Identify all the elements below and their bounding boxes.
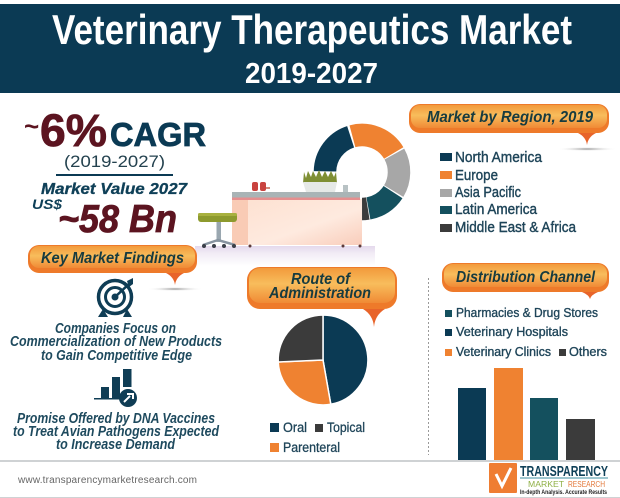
market value label: Market Value 2027: [41, 181, 188, 198]
legend: market by region: Europe: [455, 168, 498, 184]
footer rule: [0, 460, 620, 462]
legend: market by region: Latin America: [455, 202, 538, 218]
legend: distribution channel: Veterinary Clinics: [456, 344, 551, 359]
market value figure: ~58 Bn: [58, 198, 177, 241]
pie chart: route of administration: [278, 315, 368, 405]
bar chart: distribution channel: [458, 368, 595, 460]
pill heading: market by region: [409, 104, 617, 151]
header banner: [0, 4, 620, 93]
finding 2 text: Promise Offered by DNA Vaccines: [17, 411, 215, 427]
legend: market by region: [440, 150, 577, 236]
legend: distribution channel: Veterinary Hospitals: [456, 324, 568, 339]
website url: www.transparencymarketresearch.com: [17, 475, 197, 486]
legend: route of administration: [270, 420, 365, 455]
finding 1 text: to Gain Competitive Edge: [41, 348, 192, 364]
pill heading: route of administration: Route of: [291, 271, 352, 288]
legend: distribution channel: [445, 305, 607, 359]
finding 1 text: Commercialization of New Products: [10, 334, 222, 350]
finding 2 text: to Treat Avian Pathogens Expected: [13, 424, 220, 440]
pill heading: route of administration: [247, 267, 397, 327]
legend: route of administration: Topical: [327, 420, 365, 435]
CAGR and market value callout: US$: [32, 197, 63, 212]
pill heading: route of administration: Administration: [268, 285, 371, 302]
legend: market by region: Asia Pacific: [455, 185, 521, 201]
finding 2 text: [13, 411, 220, 453]
subtitle years: 2019-2027: [245, 58, 378, 90]
legend: distribution channel: Pharmacies & Drug Stores: [456, 305, 598, 320]
desk items: [252, 182, 258, 191]
CAGR and market value callout: [24, 105, 206, 241]
legend: route of administration: Parenteral: [283, 440, 340, 455]
pill heading: distribution channel: [442, 263, 609, 299]
pill heading: key market findings: Key Market Findings: [41, 250, 184, 267]
pill heading: key market findings: [28, 245, 203, 291]
stool: [198, 213, 237, 248]
pill heading: distribution channel: Distribution Channel: [456, 269, 595, 286]
icon: bar growth: [94, 369, 137, 407]
logo: transparency market research: RESEARCH: [568, 480, 605, 489]
illustration: reception desk: [195, 182, 375, 266]
legend: distribution channel: Others: [569, 344, 607, 359]
CAGR and market value callout: 6%: [40, 105, 107, 156]
desk body: [232, 199, 362, 245]
logo: transparency market research: [489, 463, 608, 496]
finding 1 text: [10, 321, 222, 364]
finding 1 text: Companies Focus on: [55, 321, 176, 337]
legend: market by region: North America: [455, 150, 543, 166]
CAGR figure: ~: [24, 111, 39, 141]
logo: transparency market research: In-depth Analysis. Accurate Results: [520, 490, 608, 496]
donut chart: market by region: [311, 121, 413, 223]
illustration: potted plant: [303, 170, 337, 192]
legend: market by region: Middle East & Africa: [455, 220, 577, 236]
pill heading: market by region: Market by Region, 2019: [427, 109, 593, 126]
logo: transparency market research: MARKET: [528, 480, 564, 489]
CAGR and market value callout: CAGR: [110, 116, 206, 153]
icon: target: [98, 278, 133, 317]
CAGR period: (2019-2027): [64, 152, 165, 171]
finding 2 text: to Increase Demand: [56, 437, 176, 453]
legend: route of administration: Oral: [283, 420, 307, 435]
